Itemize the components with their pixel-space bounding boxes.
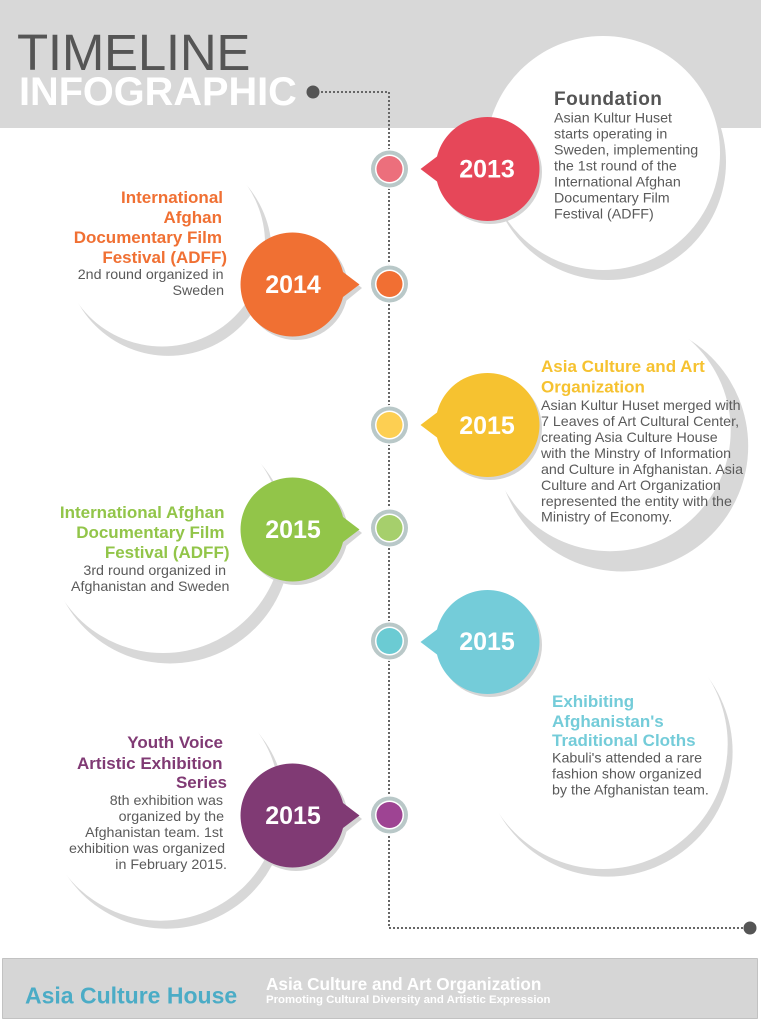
text block: Asia Culture and Art Organization: Ministry of Economy. xyxy=(541,510,672,526)
text block: Asia Culture and Art Organization: Organization xyxy=(541,378,645,396)
text block: Youth Voice Artistic Exhibition Series xyxy=(69,733,227,873)
text block: Asia Culture and Art Organization: creating Asia Culture House xyxy=(541,430,718,446)
title xyxy=(17,24,297,114)
footer panel xyxy=(2,958,758,1018)
balloon 2014: 2014 xyxy=(265,271,321,299)
text block: International Afghan Documentary Film Festival, 3rd round: Festival (ADFF) xyxy=(105,543,230,562)
text block: Exhibiting Afghanistan's Traditional Cloths: by the Afghanistan team. xyxy=(552,782,709,798)
backdrop circle: 2015 purple xyxy=(41,682,286,929)
text block: Asia Culture and Art Organization: with the Minstry of Information xyxy=(540,446,731,462)
text block: Youth Voice Artistic Exhibition Series: Artistic Exhibition xyxy=(77,754,222,773)
text block: Youth Voice Artistic Exhibition Series: in February 2015. xyxy=(115,857,227,873)
text block: International Afghan Documentary Film Festival, 2nd round: Afghan xyxy=(163,208,222,227)
text block: International Afghan Documentary Film Festival, 3rd round: 3rd round organized in xyxy=(83,563,226,579)
text block: Youth Voice Artistic Exhibition Series: 8th exhibition was xyxy=(110,793,223,809)
text block: Asia Culture and Art Organization: 7 Leaves of Art Cultural Center, xyxy=(541,414,739,430)
node 2013 xyxy=(370,149,410,189)
balloon 2013 xyxy=(420,117,542,224)
text block: International Afghan Documentary Film Festival, 2nd round: Sweden xyxy=(172,283,224,299)
backdrop circle: 2014 xyxy=(59,140,272,356)
node 2015 yellow xyxy=(370,405,410,445)
text block: Foundation xyxy=(554,89,698,222)
text block: Asia Culture and Art Organization: Culture and Art Organization xyxy=(541,478,721,494)
text block: Foundation: starts operating in xyxy=(554,126,667,142)
text block: International Afghan Documentary Film Festival, 3rd round: Documentary Film xyxy=(76,523,224,542)
text block: Youth Voice Artistic Exhibition Series: Afghanistan team. 1st xyxy=(85,825,223,841)
text block: Asia Culture and Art Organization: and Culture in Afghanistan. Asia xyxy=(541,462,743,478)
text block: Youth Voice Artistic Exhibition Series: Series xyxy=(176,773,227,792)
text block: International Afghan Documentary Film Festival, 2nd round: 2nd round organized in xyxy=(78,267,224,283)
balloon 2015 yellow: 2015 xyxy=(459,412,515,440)
text block: Exhibiting Afghanistan's Traditional Cloths: fashion show organized xyxy=(552,766,702,782)
text block: Foundation: the 1st round of the xyxy=(554,158,677,174)
footer organization name and tagline: Promoting Cultural Diversity and Artistic Expression xyxy=(266,994,550,1006)
text block: Exhibiting Afghanistan's Traditional Cloths: Kabuli's attended a rare xyxy=(552,750,702,766)
text block: Asia Culture and Art Organization xyxy=(540,357,743,526)
text block: Foundation: Asian Kultur Huset xyxy=(554,110,672,126)
footer organization name and tagline: Asia Culture and Art Organization xyxy=(266,974,541,994)
text block: International Afghan Documentary Film Festival, 3rd round xyxy=(60,503,230,595)
footer organization name and tagline xyxy=(266,974,550,1006)
text block: Youth Voice Artistic Exhibition Series: organized by the xyxy=(119,809,224,825)
text block: Youth Voice Artistic Exhibition Series: exhibition was organized xyxy=(69,841,225,857)
header band xyxy=(0,0,761,128)
node 2015 purple xyxy=(370,795,410,835)
node 2014 xyxy=(370,264,410,304)
balloon 2015 purple: 2015 xyxy=(265,802,321,830)
text block: Exhibiting Afghanistan's Traditional Cloths: Exhibiting xyxy=(552,692,634,711)
dotted timeline connector xyxy=(306,86,756,934)
balloon 2015 teal xyxy=(420,590,542,697)
backdrop circle: 2015 yellow xyxy=(489,310,748,572)
text block: Foundation: Documentary Film xyxy=(554,190,670,206)
backdrop circle: 2015 green xyxy=(43,413,290,664)
text block: Foundation: Sweden, implementing xyxy=(554,142,698,158)
balloon 2015 yellow xyxy=(420,373,542,480)
text block: Foundation: Foundation xyxy=(554,89,662,110)
balloon 2014 xyxy=(241,232,362,340)
backdrop circle: 2015 teal xyxy=(478,619,733,877)
title: INFOGRAPHIC xyxy=(19,70,297,114)
text block: International Afghan Documentary Film Festival, 2nd round: Documentary Film xyxy=(74,228,222,247)
node 2015 teal xyxy=(370,621,410,661)
backdrop circle: 2013 xyxy=(486,36,726,280)
node 2015 green xyxy=(370,508,410,548)
text block: Youth Voice Artistic Exhibition Series: Youth Voice xyxy=(127,733,223,752)
text block: Asia Culture and Art Organization: Asia Culture and Art xyxy=(541,357,705,376)
footer brand name: Asia Culture House xyxy=(25,982,237,1008)
text block: Foundation: International Afghan xyxy=(554,174,681,190)
text block: International Afghan Documentary Film Festival, 2nd round: Festival (ADFF) xyxy=(102,248,227,267)
text block: International Afghan Documentary Film Festival, 2nd round: International xyxy=(121,188,223,207)
text block: Exhibiting Afghanistan's Traditional Cloths: Afghanistan's xyxy=(552,712,664,731)
text block: International Afghan Documentary Film Festival, 3rd round: International Afghan xyxy=(60,503,224,522)
text block: International Afghan Documentary Film Festival, 2nd round xyxy=(74,188,227,299)
balloon 2015 teal: 2015 xyxy=(459,628,515,656)
text block: Asia Culture and Art Organization: Asian Kultur Huset merged with xyxy=(541,398,741,414)
balloon 2015 green: 2015 xyxy=(265,516,321,544)
text block: Exhibiting Afghanistan's Traditional Cloths: Traditional Cloths xyxy=(552,731,696,750)
balloon 2015 purple xyxy=(241,764,362,871)
title: TIMELINE xyxy=(17,24,250,81)
text block: International Afghan Documentary Film Festival, 3rd round: Afghanistan and Sweden xyxy=(71,579,230,595)
balloon 2013: 2013 xyxy=(459,156,515,184)
text block: Exhibiting Afghanistan's Traditional Cloths xyxy=(552,692,709,798)
balloon 2015 green xyxy=(241,478,362,585)
text block: Asia Culture and Art Organization: represented the entity with the xyxy=(541,494,732,510)
text block: Foundation: Festival (ADFF) xyxy=(554,206,654,222)
